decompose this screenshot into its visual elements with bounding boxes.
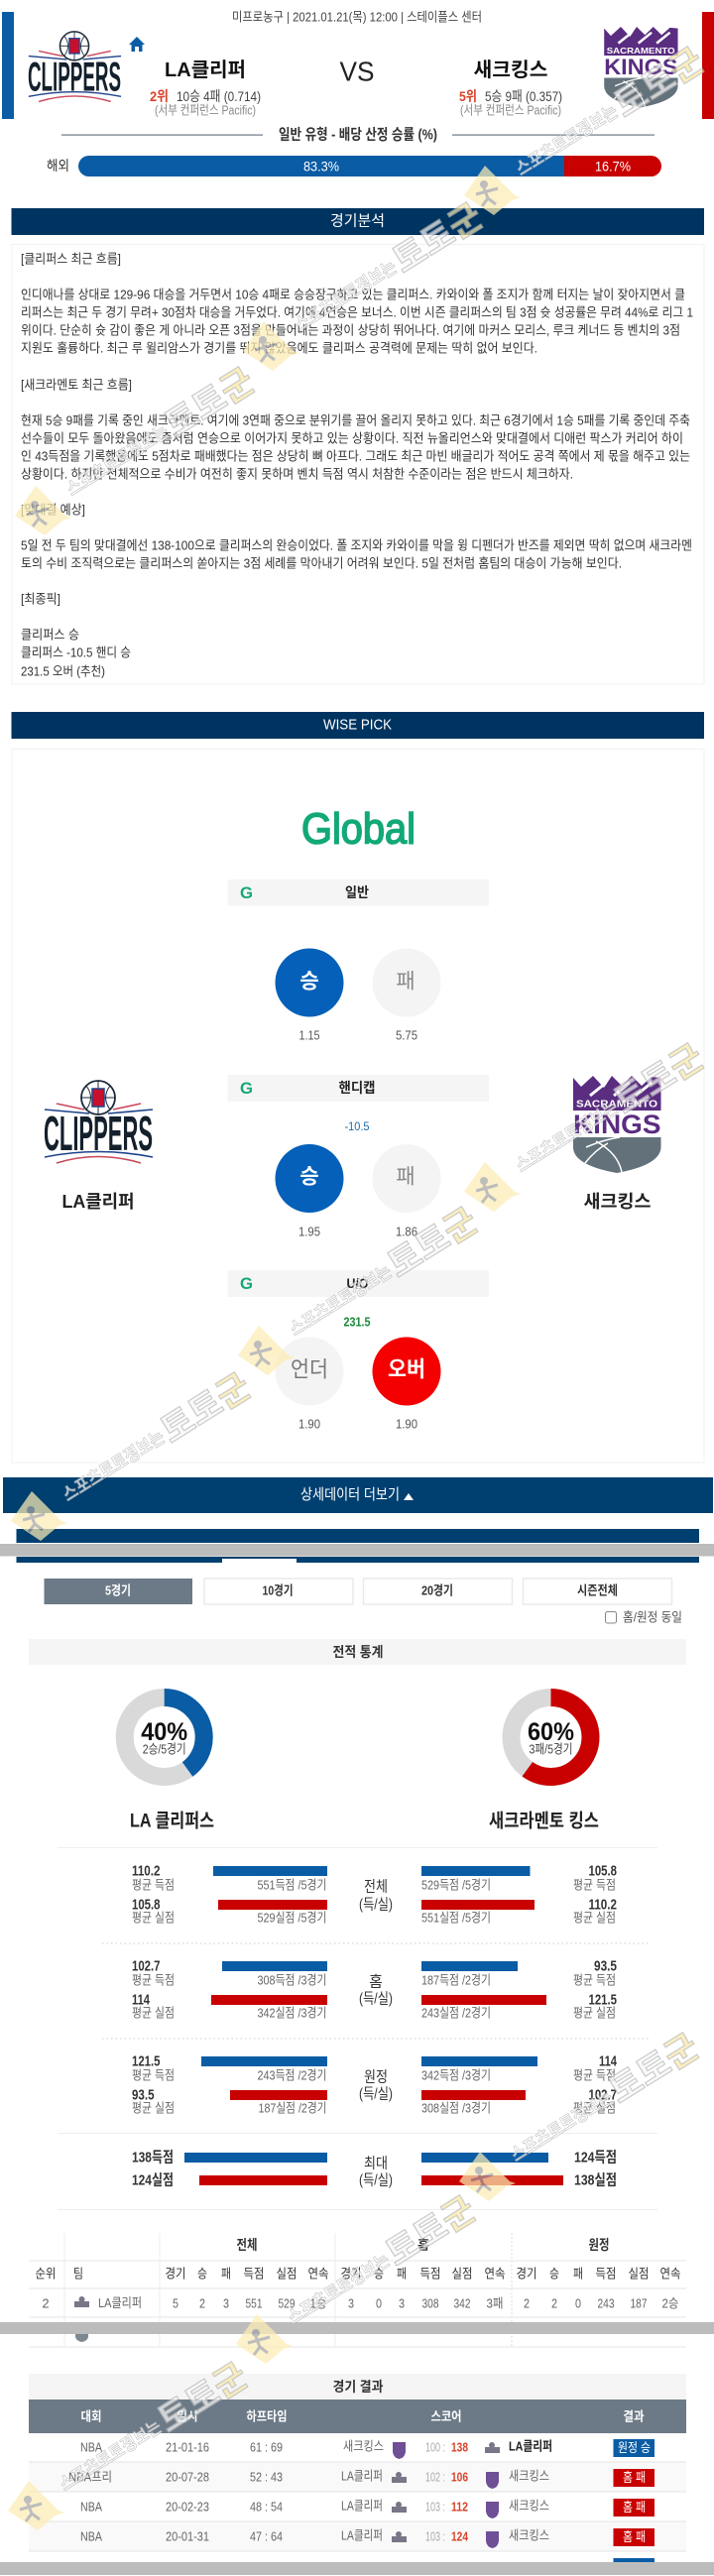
results header: 대회 [81,2409,101,2423]
home center label: 홈 [369,1973,383,1991]
versus: VS [339,56,375,87]
text: clippers heading: [클리퍼스 최근 흐름] [21,252,121,266]
away center label: 원정 [364,2068,388,2086]
stats: overall: 평균 득점 [132,1878,175,1892]
results row 1: 61 : 69 [250,2439,283,2455]
stats: overall: 529득점 /5경기 [421,1878,491,1892]
results row 4: NBA [80,2528,102,2544]
away rank: 5위 [459,88,477,104]
donut: clippers [125,1698,204,1777]
blue segment [78,156,564,176]
logo: clippers large [44,1081,153,1163]
home left values: 102.7 [132,1957,161,1975]
market: handicap: 패 [396,1166,416,1188]
column headers: 팀 [73,2267,83,2281]
icon: home [129,37,145,52]
group headers [236,2237,609,2253]
button: more data: 상세데이터 더보기 [300,1486,400,1503]
logo: kings: KINGS [604,55,678,79]
text: clippers paragraph [21,288,693,355]
watermark 6: 토토군 [155,1366,257,1451]
table row: clippers: 187 [631,2296,647,2310]
results row 3: 홈 패 [623,2500,646,2515]
column headers: 패 [397,2267,407,2281]
table row: clippers: 529 [278,2296,296,2310]
table row: clippers: 2 [551,2296,557,2310]
match info line: 미프로농구 | 2021.01.21(목) 12:00 | 스테이플스 센터 [232,10,482,24]
results row 1: 원정 승 [618,2440,651,2455]
donut: kings: 60% [528,1718,574,1746]
results row 3: NBA [80,2499,102,2515]
stats: away: 187실점 /2경기 [258,2100,327,2116]
away team name: 새크킹스 [474,59,547,81]
text: final pick list [21,627,131,678]
standings table [29,2233,686,2347]
text: sacramento heading: [새크라멘토 최근 흐름] [21,377,132,393]
home team color bar [2,12,14,119]
watermark 6: 스포츠토토정보는 [60,1427,169,1505]
column headers: 득점 [595,2267,617,2281]
stats: home: 114 [132,1991,150,2009]
results row 3: 20-02-23 [166,2499,209,2515]
results row 2: 52 : 43 [250,2469,283,2485]
market: over under: U/O [347,1275,369,1291]
table row: clippers: 1승 [309,2296,327,2310]
stats: away: 평균 득점 [132,2068,175,2082]
group headers: 홈 [417,2237,429,2253]
watermark 6 [11,1366,257,1541]
stats: maximum: 124득점 [574,2150,617,2166]
results row 4: 홈 패 [623,2529,646,2544]
results row 4: LA클리퍼 [341,2528,383,2542]
column headers: 승 [549,2267,559,2281]
market: moneyline [228,879,489,1043]
stats: home: 121.5 [589,1991,617,2009]
stat team name: clippers: LA 클리퍼스 [130,1811,214,1832]
overall center label: 전체 [364,1878,388,1896]
home rank: 2위 [150,88,169,104]
stats: away: 평균 실점 [573,2100,616,2116]
text: matchup heading: [맞대결 예상] [21,502,85,518]
stats: overall: 529실점 /5경기 [258,1910,327,1926]
match header: CLIPPERS [28,54,121,99]
watermark 3 [15,361,261,535]
home team name: LA클리퍼 [165,59,246,81]
odds: 1.15 [299,1027,319,1043]
filter tabs: 10경기 [262,1582,294,1598]
probability heading: 일반 유형 - 배당 산정 승률 (%) [279,127,437,143]
market: over under [228,1270,489,1432]
results row 1: NBA [80,2439,102,2455]
column headers: 연속 [484,2267,506,2281]
watermark 5 [238,1201,484,1375]
tab navigation bar [16,1529,699,1563]
stats: overall: (득/실) [359,1896,393,1914]
market: moneyline: 5.75 [396,1027,417,1043]
stats: home [132,1957,617,2021]
stats: overall [132,1862,617,1926]
market: handicap: -10.5 [345,1119,370,1133]
stats: away [132,2052,617,2116]
watermark 2: 토토군 [387,196,489,281]
pick: lose [373,948,440,1017]
away conference: (서부 컨퍼런스 Pacific) [460,103,561,117]
results row 3 [80,2499,654,2518]
stats: home: (득/실) [359,1991,393,2007]
watermark 1: 스포츠토토정보는 [513,101,622,179]
heading: analysis: 경기분석 [330,212,385,230]
results row 3: LA클리퍼 [341,2499,383,2513]
max left values: 138득점 [132,2150,174,2166]
table row: clippers: 2승 [662,2296,679,2310]
watermark 1 [464,41,710,215]
results row 1: 21-01-16 [166,2439,209,2455]
market: handicap: 핸디캡 [339,1080,375,1096]
pick: over [373,1337,440,1406]
stats: home: 243실점 /2경기 [421,2005,491,2021]
column headers: 경기 [165,2267,186,2281]
watermark 4: 토토군 [608,1037,710,1121]
away percent: 16.7% [595,159,631,175]
heading: record stats: 전적 통계 [333,1644,383,1660]
market: over under: G [240,1274,253,1293]
home percent: 83.3% [303,159,339,175]
logo: kings [604,27,678,107]
column headers: 승 [197,2267,207,2281]
results row 4: 새크킹스 [509,2528,549,2542]
panel: wise pick: CLIPPERS [44,1108,153,1161]
column headers: 실점 [276,2267,298,2281]
stats: home: 평균 득점 [573,1973,616,1987]
logo: kings: SACRAMENTO [607,46,675,56]
heading: match results [29,2374,686,2400]
results row 2: LA클리퍼 [341,2469,383,2483]
logo: global: Global [301,805,416,853]
table row: clippers: 243 [597,2296,615,2310]
market: over under: 언더 [291,1356,328,1382]
market: over under: 1.90 [396,1416,417,1432]
watermark 1: 토토군 [608,41,710,125]
win probability bar [47,127,661,176]
results header [29,2400,686,2433]
results row 4: 47 : 64 [250,2528,283,2544]
column headers: 득점 [420,2267,440,2281]
overall right values [421,1866,530,1876]
stats: overall: 105.8 [589,1862,617,1880]
watermark 2 [243,196,489,371]
odds: 1.95 [298,1224,320,1239]
logo: clippers [28,32,121,101]
table row: clippers: 2 [199,2296,205,2310]
column headers [36,2267,681,2281]
stats: overall: 평균 실점 [132,1910,175,1926]
heading: analysis [12,208,704,235]
market: moneyline: G [240,883,253,902]
panel: wise pick [12,750,704,1463]
divider left [61,135,263,136]
match header [2,10,714,119]
table row: clippers [42,2295,679,2310]
text: final pick list: 231.5 오버 (추천) [21,664,105,678]
table row: clippers: 3 [348,2296,354,2310]
max center label: 최대 [364,2156,388,2171]
gray cut bands [0,1544,714,2575]
button: more data [3,1477,713,1513]
stats: away: 342득점 /3경기 [421,2068,491,2082]
watermark 7: 스포츠토토정보는 [508,2087,617,2166]
results row 4: 124 [451,2528,469,2544]
results row 3: 112 [451,2499,468,2515]
stats: away: 평균 득점 [573,2068,616,2082]
market: handicap: 1.86 [396,1224,417,1239]
filter tabs [44,1579,672,1604]
results row 2: 20-07-28 [166,2469,209,2485]
results row 2: 106 [451,2469,468,2485]
checkbox: same home away: 홈/원정 동일 [623,1610,682,1624]
heading: match results: 경기 결과 [333,2379,384,2395]
away right values [421,2056,537,2066]
column headers: 순위 [36,2267,56,2281]
text: final pick list: 클리퍼스 -10.5 핸디 승 [21,644,131,660]
watermark 4 [464,1037,710,1212]
market: over under: 231.5 [343,1315,371,1329]
watermark 7 [459,2027,705,2201]
column headers: 실점 [452,2267,472,2281]
market: moneyline: 일반 [345,884,369,900]
home right values [421,1961,518,1971]
column headers: 패 [221,2267,231,2281]
results row 5 fragment [613,2558,654,2562]
pick: win [276,948,343,1017]
team name: clippers: LA클리퍼 [61,1192,135,1212]
watermark 9: 스포츠토토정보는 [57,2416,166,2495]
column headers: 연속 [307,2267,329,2281]
market: moneyline: 승 [299,970,319,994]
table row: clippers: 0 [575,2296,581,2310]
stats: maximum: 138실점 [574,2171,617,2189]
stats: overall: 110.2 [589,1896,617,1914]
market: moneyline: 패 [396,970,416,994]
results row 1: LA클리퍼 [509,2439,552,2453]
results row 2 [68,2469,654,2489]
stats: away: 93.5 [132,2086,155,2104]
results row 3: 48 : 54 [250,2499,283,2515]
watermark 8 [236,2189,482,2364]
stats: home: 342실점 /3경기 [258,2005,327,2021]
watermark 7: 토토군 [603,2027,705,2111]
column headers: 실점 [629,2267,649,2281]
stats: overall: 평균 실점 [573,1910,616,1926]
filter tabs: 시즌전체 [577,1582,618,1598]
stats: overall: 평균 득점 [573,1878,616,1892]
text: final pick list: 클리퍼스 승 [21,627,79,643]
watermark 4: 스포츠토토정보는 [513,1098,622,1176]
market: handicap: G [240,1079,253,1098]
donut: kings [512,1698,591,1777]
table row: clippers: 5 [173,2296,178,2310]
tab: 20 games [363,1579,512,1604]
column headers: 경기 [516,2267,537,2281]
heading: record stats [29,1639,686,1665]
results row 1: 138 [451,2439,468,2455]
max right values [421,2153,548,2163]
results row 1 [80,2439,654,2459]
logo: kings large: SACRAMENTO [576,1099,657,1111]
overall left values: 110.2 [132,1862,161,1880]
logo: kings large [573,1076,660,1173]
table row: clippers: 3패 [486,2296,504,2310]
table row: clippers: 2 [524,2296,530,2310]
home conference: (서부 컨퍼런스 Pacific) [155,103,256,117]
table row: clippers: 3 [399,2296,405,2310]
odds: 1.90 [298,1416,320,1432]
away record: 5승 9패 (0.357) [485,88,562,104]
stats: away: 평균 실점 [132,2100,175,2116]
stats: home: 187득점 /2경기 [421,1973,491,1987]
table row: clippers: 3 [223,2296,229,2310]
red segment [564,156,661,176]
panel: analysis [12,244,704,684]
stats: overall: 105.8 [132,1896,161,1914]
stats: away: 308실점 /3경기 [421,2100,491,2116]
results row 2: 새크킹스 [509,2469,549,2483]
tab: season [524,1579,672,1604]
region label: 해외 [47,158,69,174]
results header: 결과 [623,2409,645,2423]
text: sacramento paragraph [21,412,690,482]
results header: 하프타임 [246,2409,288,2423]
results row 4: 103 : [425,2528,445,2544]
market: handicap [228,1075,489,1239]
watermark 5: 토토군 [382,1201,484,1285]
stats: overall: 551득점 /5경기 [258,1878,327,1892]
text: sacramento paragraph: 상황이다. 하지만 전체적으로 수비가 여전히 좋지 못하며 벤치 득점 역시 처참한 수준이라는 점은 반드시 체크하자. [21,466,573,482]
results header: 일시 [177,2409,198,2423]
text: final pick heading: [최종픽] [21,591,60,607]
stats: home: 평균 실점 [573,2005,616,2021]
column headers: 승 [374,2267,384,2281]
text: matchup paragraph: 토의 수비 조직력으로는 클리퍼스의 쏟아지는 3점 세례를 막아내기 어려워 보인다. 5일 전처럼 홈팀의 대승이 가능해 보인다. [21,555,622,571]
results table [29,2400,686,2562]
market: over under: 오버 [388,1356,425,1382]
divider right [452,135,654,136]
stats: home: 평균 실점 [132,2005,175,2021]
market: handicap: 승 [299,1166,319,1188]
results row 2: 102 : [425,2469,445,2485]
stats: home: 93.5 [594,1957,617,1975]
watermark 8: 토토군 [380,2189,482,2274]
results row 4: 20-01-31 [166,2528,209,2544]
stats: maximum: (득/실) [359,2171,393,2189]
tab: 10 games [204,1579,353,1604]
stats: away: 114 [599,2052,617,2070]
stat team name: kings: 새크라멘토 킹스 [489,1811,599,1832]
results row 2: NBA프리 [68,2469,112,2485]
watermark 9 [8,2356,254,2530]
pick: win [276,1144,343,1213]
watermark 3: 스포츠토토정보는 [63,421,173,500]
team name: kings: 새크킹스 [583,1192,651,1212]
table row: clippers: 0 [376,2296,382,2310]
results row 4 [80,2528,654,2548]
pick: lose [373,1144,440,1213]
stats: away: 243득점 /2경기 [258,2068,327,2082]
table row: clippers: 551 [246,2296,262,2310]
column headers: 패 [573,2267,583,2281]
tab: 5 games active [44,1579,192,1604]
group headers: 전체 [236,2237,258,2253]
stats: home: 308득점 /3경기 [258,1973,327,1987]
results row 2: 홈 패 [623,2470,646,2485]
watermark 3: 토토군 [159,361,261,445]
home record: 10승 4패 (0.714) [177,88,261,104]
stats: maximum [132,2150,617,2189]
filter tabs: 20경기 [421,1582,453,1598]
column headers: 득점 [244,2267,264,2281]
away left values: 121.5 [132,2052,161,2070]
table row fragment: kings icon [75,2334,88,2342]
away team color bar [702,12,714,119]
stats: away: 102.7 [589,2086,617,2104]
text: matchup paragraph [21,537,692,571]
heading: wise pick: WISE PICK [323,716,392,734]
stats: home: 평균 득점 [132,1973,175,1987]
logo: kings large: KINGS [573,1110,661,1139]
results row 1: 새크킹스 [343,2439,384,2453]
watermark 5: 스포츠토토정보는 [287,1261,396,1340]
results header: 스코어 [430,2409,462,2423]
column headers: 연속 [660,2267,681,2281]
pick: under [276,1337,343,1406]
group headers: 원정 [589,2237,609,2253]
stats: away: (득/실) [359,2086,393,2102]
table row: clippers: 2 [42,2296,50,2310]
stats: maximum: 124실점 [132,2171,174,2189]
watermark 9: 토토군 [152,2356,254,2440]
donut: clippers: 2승/5경기 [143,1741,186,1757]
watermark 8: 스포츠토토정보는 [285,2250,394,2328]
text: clippers paragraph: 지원도 훌륭하다. 최근 루 윌리암스가 경기를 뛰지 않았음에도 클리퍼스 공격력에 문제는 딱히 없어 보인다. [21,341,537,355]
results row 3: 새크킹스 [509,2499,549,2513]
heading: wise pick [12,712,704,739]
table row: clippers: LA클리퍼 [98,2295,142,2310]
results row 3: 103 : [425,2499,445,2515]
donut: kings: 3패/5경기 [530,1741,573,1757]
filter tabs: 5경기 [105,1582,131,1598]
donut: clippers: 40% [141,1718,187,1746]
table row: clippers: 342 [454,2296,470,2310]
column headers: 경기 [341,2267,361,2281]
watermark 2: 스포츠토토정보는 [292,257,401,335]
stats: overall: 551실점 /5경기 [421,1910,491,1926]
results row 1: 100 : [425,2439,445,2455]
table row: clippers: 308 [422,2296,438,2310]
